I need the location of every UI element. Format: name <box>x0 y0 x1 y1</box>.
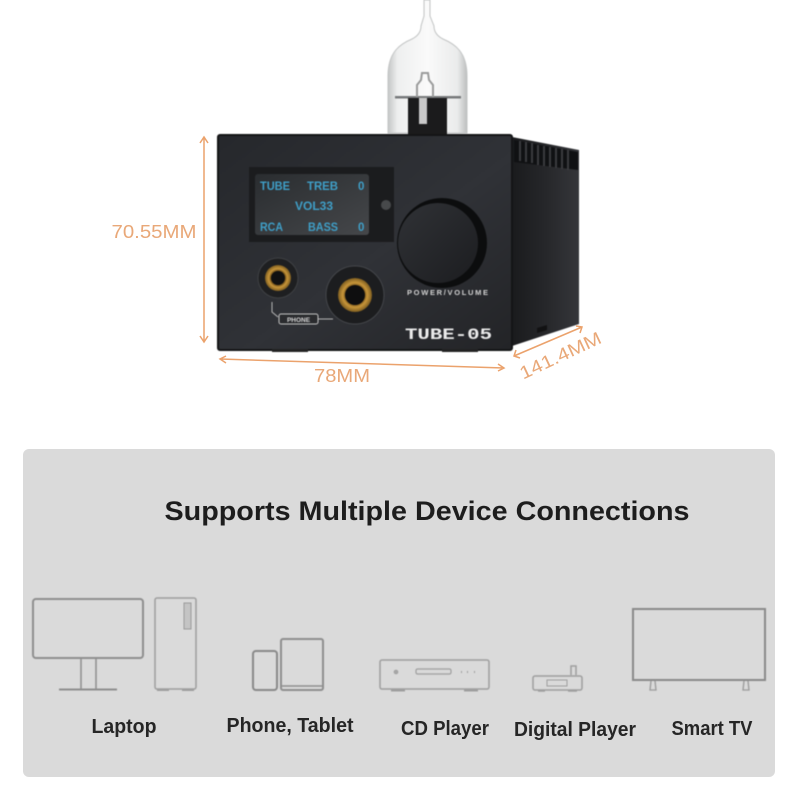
dimension: width: 78MM <box>314 366 370 386</box>
phone label: PHONE <box>287 317 311 324</box>
heading: Supports Multiple Device Connections <box>164 496 690 526</box>
label: Digital Player: Digital Player <box>514 719 636 741</box>
product: TUBE-05 amplifier <box>218 0 579 352</box>
display: VOL33 <box>295 201 333 213</box>
display: TUBE <box>260 181 290 193</box>
dimension: height <box>112 137 208 342</box>
label: Phone, Tablet: Phone, Tablet <box>226 715 354 737</box>
dimension: depth: 141.4MM <box>516 328 605 383</box>
volume knob <box>397 198 487 288</box>
label: CD Player: CD Player <box>401 718 489 740</box>
display: RCA <box>260 222 283 234</box>
icon: desktop tower <box>155 598 196 690</box>
dimension: width <box>220 356 504 386</box>
model name: TUBE-05 <box>405 326 492 344</box>
panel: device connections <box>23 449 775 777</box>
icon: smart TV <box>633 609 765 690</box>
power/volume label: POWER/VOLUME <box>407 288 488 297</box>
icon: CD player <box>380 660 489 690</box>
display: 0 <box>358 181 364 193</box>
indicator light <box>381 200 391 210</box>
icon: monitor <box>33 599 143 690</box>
label: Smart TV: Smart TV <box>672 718 753 740</box>
icon: phone <box>253 651 277 690</box>
display: BASS <box>308 222 338 234</box>
icon: vacuum tube <box>388 0 467 134</box>
front panel <box>218 135 512 350</box>
icon: digital player <box>533 666 582 691</box>
display: TREB <box>307 181 338 193</box>
side of the case <box>512 137 579 346</box>
icon: tablet <box>281 639 323 690</box>
display: 0 <box>358 222 364 234</box>
label: Laptop: Laptop <box>92 716 156 738</box>
phone label <box>272 302 333 324</box>
large headphone jack <box>326 266 384 324</box>
display <box>249 167 394 242</box>
small headphone jack <box>258 258 298 298</box>
dimension: height: 70.55MM <box>112 222 196 242</box>
